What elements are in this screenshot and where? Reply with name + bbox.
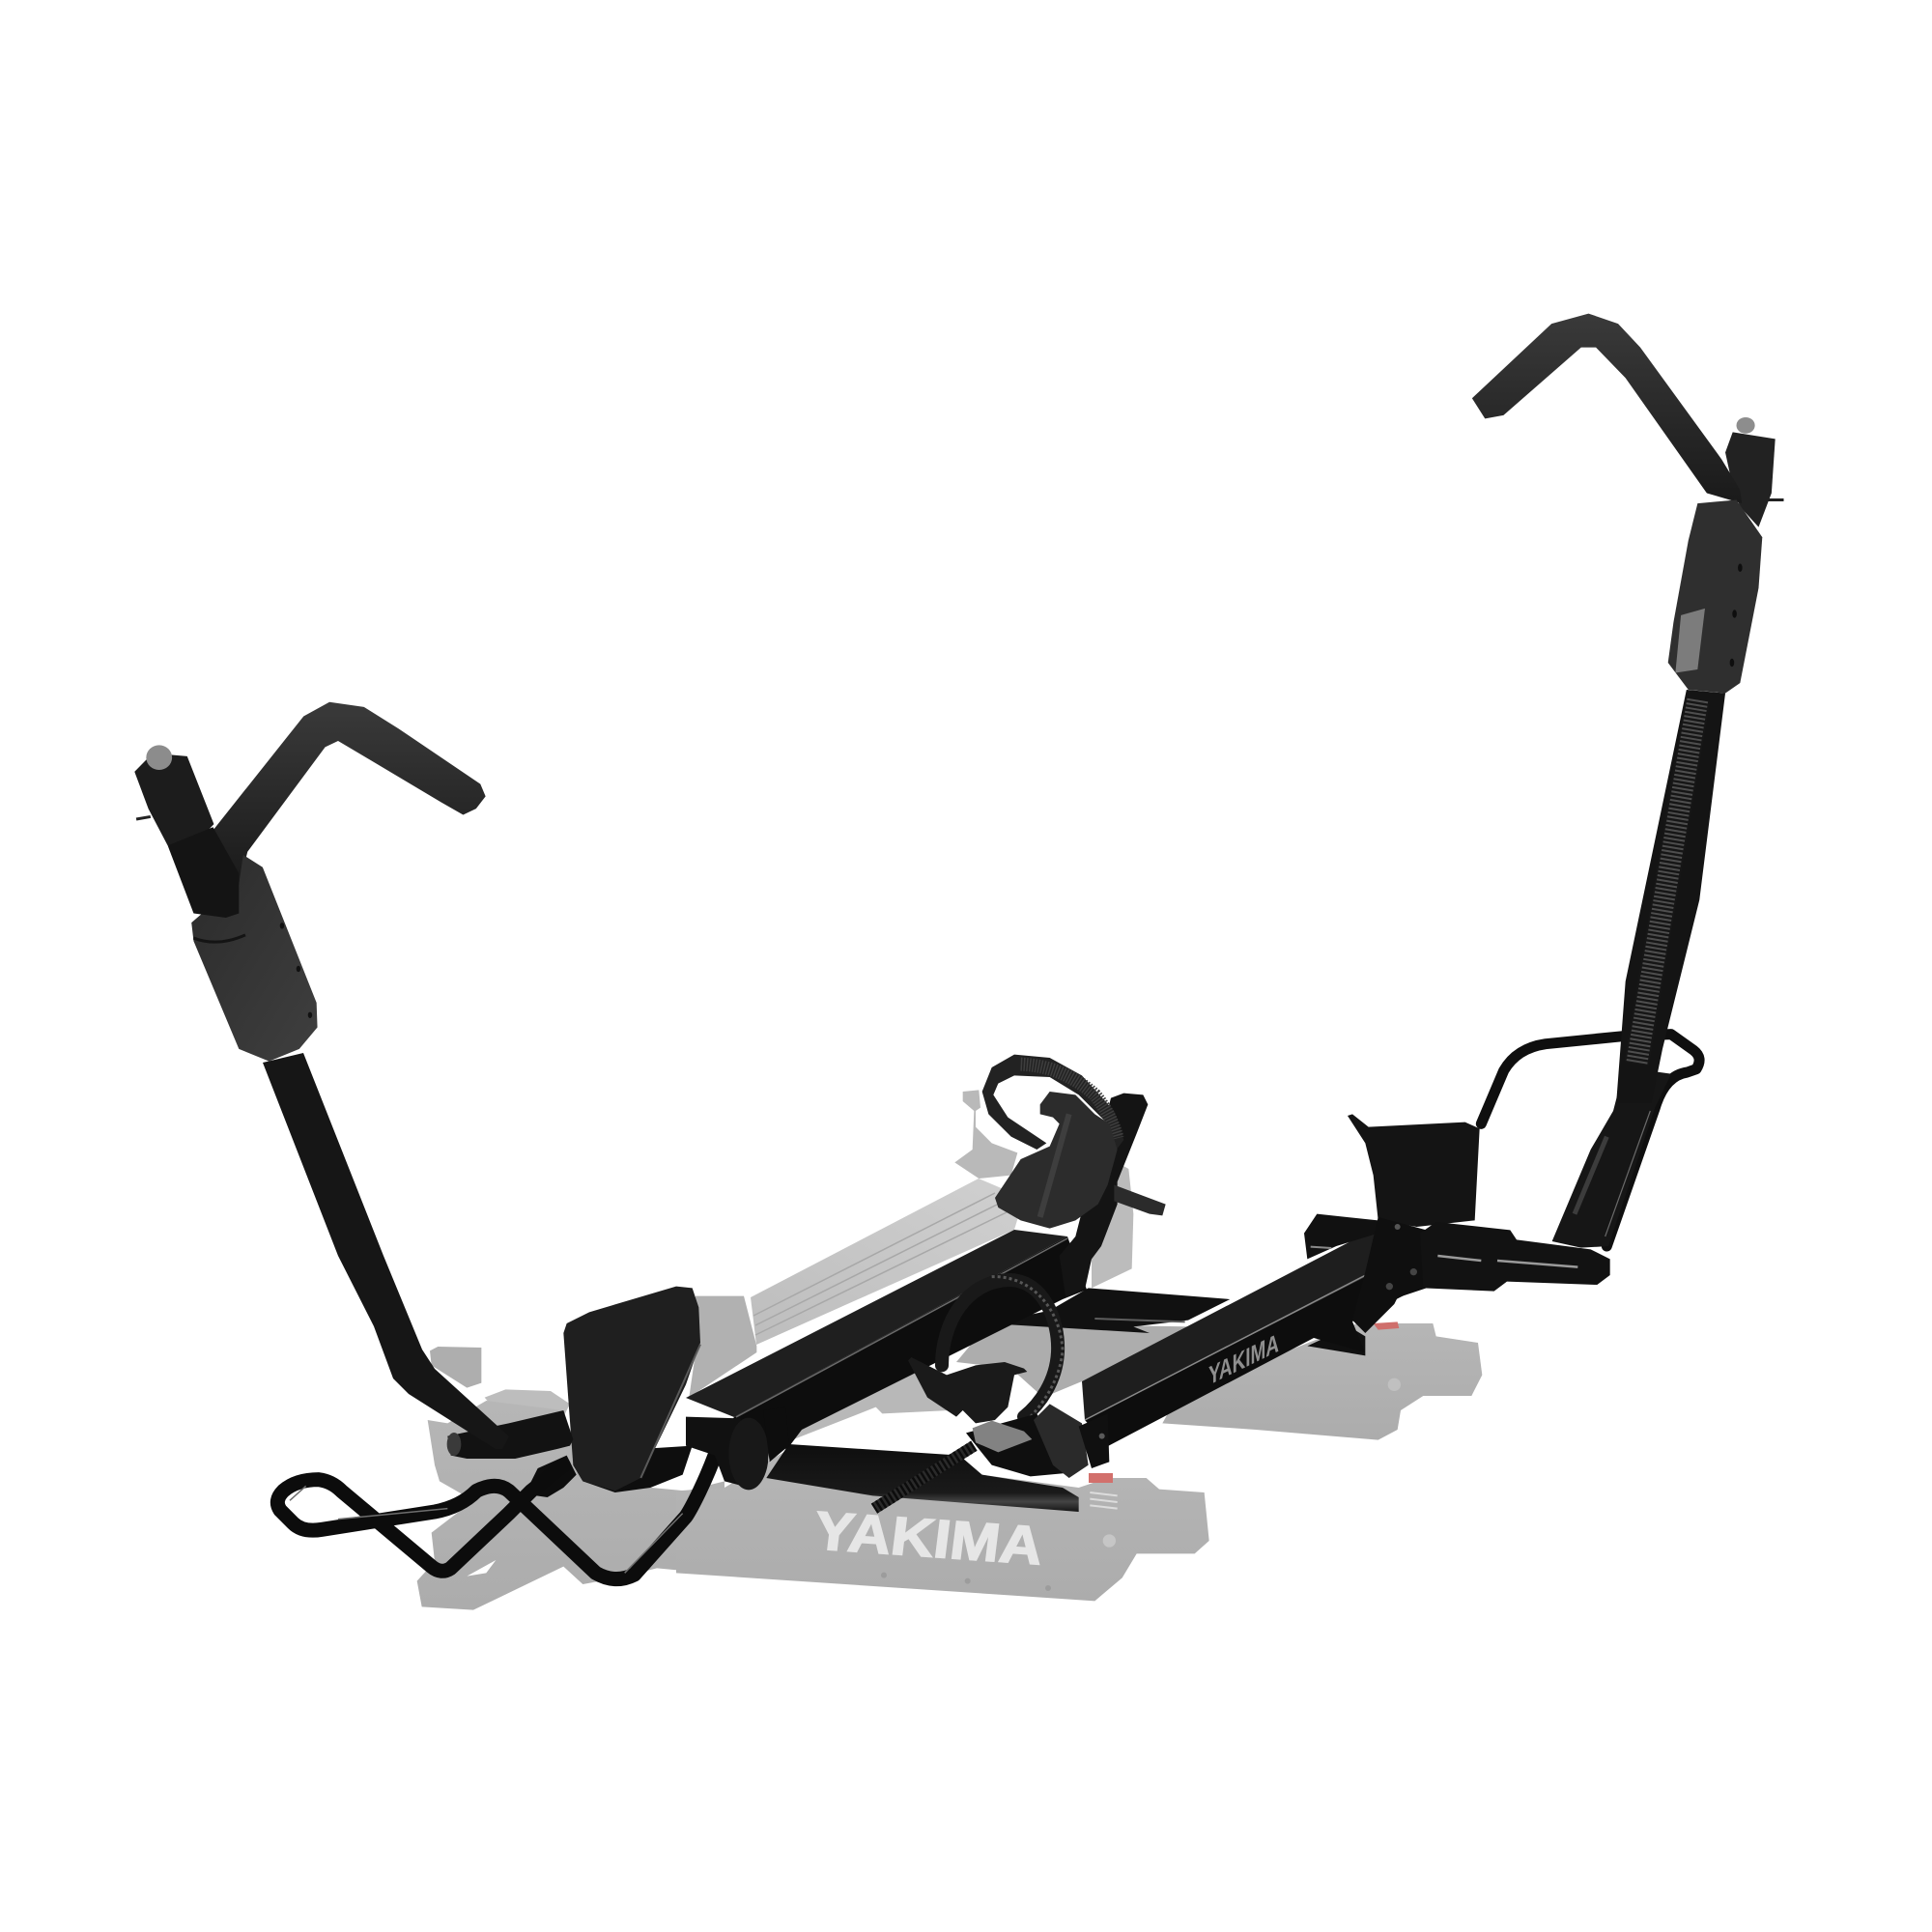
cross bars xyxy=(766,1288,1365,1512)
right cup and axle xyxy=(1304,1035,1699,1333)
handle xyxy=(213,702,486,886)
pin xyxy=(136,816,151,819)
hub block xyxy=(1034,1404,1089,1478)
knob face xyxy=(728,1418,769,1490)
rear cross bar right stub xyxy=(1307,1326,1365,1355)
right cup xyxy=(1348,1114,1480,1227)
rear wheel cup assembly xyxy=(982,1055,1166,1297)
front ring strap xyxy=(908,1277,1109,1478)
head xyxy=(1725,432,1776,527)
lower axle xyxy=(447,1410,573,1459)
left arm assembly xyxy=(134,702,509,1449)
rear cup xyxy=(995,1092,1118,1229)
strut lower xyxy=(1552,1067,1671,1248)
tube end plate xyxy=(1079,1413,1109,1468)
cup hub xyxy=(573,1446,693,1492)
rear cross bar xyxy=(988,1288,1230,1333)
knob xyxy=(1737,417,1755,434)
handle xyxy=(1472,314,1742,503)
knob cylinder xyxy=(686,1417,749,1488)
post xyxy=(168,827,239,918)
rear strap xyxy=(982,1055,1123,1152)
ghost: YAKIMA wordmark: YAKIMA xyxy=(811,1499,1046,1576)
cup xyxy=(563,1287,700,1491)
ghosted lower mount: faded rack behind xyxy=(417,1090,1482,1610)
knob xyxy=(146,745,172,770)
pin xyxy=(1760,498,1783,501)
red clip rear xyxy=(1374,1321,1399,1330)
buckle xyxy=(973,1421,1032,1452)
strut upper xyxy=(1616,690,1725,1103)
bracket xyxy=(525,1456,577,1497)
hub disc xyxy=(966,1413,1065,1476)
upper arm xyxy=(134,702,486,1062)
bent loop bar xyxy=(277,1456,715,1579)
ghost: upper extrusion xyxy=(751,1179,1024,1345)
clamp and axle xyxy=(1420,1222,1610,1292)
ratchet strip xyxy=(1636,700,1697,1064)
lower bar xyxy=(263,1053,509,1449)
left tray tube xyxy=(686,1230,1087,1449)
bolts on tube end xyxy=(763,1407,789,1462)
sleeve xyxy=(1668,500,1762,694)
sleeve dots xyxy=(280,923,284,928)
left knob xyxy=(686,1407,789,1490)
loop bar upper xyxy=(1481,1035,1699,1246)
strap tail ratchet xyxy=(874,1446,974,1509)
right tray tube xyxy=(1082,1227,1425,1446)
sleeve xyxy=(191,855,318,1062)
ghost: left mount blocks xyxy=(417,1347,724,1610)
right arm assembly xyxy=(1472,314,1783,1103)
ghost: rear rail xyxy=(1162,1321,1482,1440)
rear cup backing xyxy=(1060,1094,1148,1297)
strap tail xyxy=(1114,1185,1166,1215)
ghost: rear upper parts xyxy=(954,1090,1191,1398)
red clip front xyxy=(1089,1473,1113,1483)
rear axle stub xyxy=(1304,1214,1378,1259)
hub bolts xyxy=(1352,1217,1427,1333)
ghost: front rail xyxy=(676,1296,1209,1601)
front small cup xyxy=(908,1357,1027,1423)
strap ridges xyxy=(1021,1065,1118,1138)
rail wordmark: YAKIMA xyxy=(1208,1328,1279,1392)
front left wheel cup xyxy=(447,1287,700,1497)
grey button xyxy=(1675,609,1705,673)
sleeve dots xyxy=(1738,564,1743,572)
front cross bar xyxy=(766,1444,1079,1512)
head block xyxy=(134,753,213,845)
